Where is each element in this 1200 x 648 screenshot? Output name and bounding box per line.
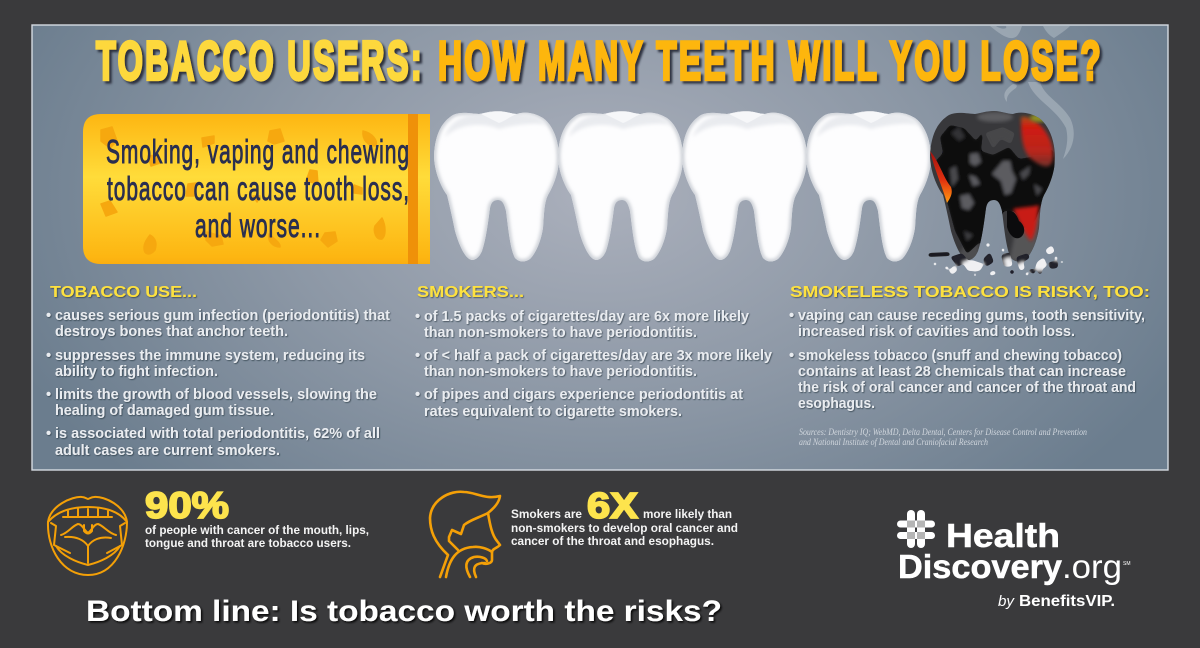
burn: top right	[1021, 117, 1053, 166]
dark patch over right root burn	[1007, 211, 1024, 238]
cigarette-shaped callout	[83, 114, 430, 264]
stat: 90 percent: of people with cancer of the mouth, lips,	[145, 523, 369, 537]
heading: smokeless tobacco: SMOKELESS TOBACCO IS RISKY, TOO:	[790, 284, 1150, 301]
logo: HealthDiscovery.org: .org	[1062, 548, 1122, 585]
title	[96, 30, 1103, 92]
stat: 90 percent	[145, 485, 369, 550]
column: tobacco use	[46, 284, 390, 459]
logo: HealthDiscovery.org: SM	[1123, 561, 1130, 567]
column: smokeless tobacco: •	[789, 348, 794, 364]
stat: 90 percent: 90%	[145, 485, 229, 526]
column: smokeless tobacco: the risk of oral cancer and cancer of the throat and	[798, 380, 1136, 396]
column: tobacco use: healing of damaged gum tissue.	[55, 403, 274, 419]
column: tobacco use: •	[46, 387, 51, 403]
icon: burnt tooth	[930, 111, 1055, 263]
column: smokers: of pipes and cigars experience periodontitis at	[424, 387, 743, 403]
column: smokeless tobacco: •	[789, 308, 794, 324]
column: smokers: than non-smokers to have periodontitis.	[424, 364, 697, 380]
column: smokers: •	[415, 348, 420, 364]
icon: healthy tooth 3	[682, 111, 807, 262]
icon: healthy tooth 1	[434, 111, 559, 262]
logo mark	[897, 510, 935, 548]
burn: right root	[1013, 205, 1039, 241]
icon: healthy tooth 2	[558, 111, 683, 262]
stat: 6X	[511, 485, 738, 548]
heading: tobacco use: TOBACCO USE...	[50, 284, 197, 301]
column: smokers: than non-smokers to have periodontitis.	[424, 325, 697, 341]
column: smokeless tobacco	[789, 284, 1150, 412]
logo: HealthDiscovery.org: Discovery	[898, 548, 1063, 585]
column: tobacco use: adult cases are current smokers.	[55, 443, 280, 459]
column: tobacco use: causes serious gum infection (periodontitis) that	[55, 308, 390, 324]
column: smokeless tobacco: smokeless tobacco (snuff and chewing tobacco)	[798, 348, 1122, 364]
tobacco flecks	[101, 127, 385, 254]
stat: 90 percent: tongue and throat are tobacco users.	[145, 536, 351, 550]
icon: open mouth	[48, 497, 127, 575]
burn: left edge	[930, 151, 952, 203]
sources note	[799, 427, 1087, 447]
column: tobacco use: destroys bones that anchor teeth.	[55, 324, 288, 340]
column: smokeless tobacco: increased risk of cavities and tooth loss.	[798, 324, 1075, 340]
sources note: Sources: Dentistry IQ; WebMD, Delta Dental, Centers for Disease Control and Prevention	[799, 427, 1087, 437]
stat: 6X: cancer of the throat and esophagus.	[511, 534, 714, 548]
stat: 6X: Smokers are	[511, 507, 582, 521]
sources note: and National Institute of Dental and Craniofacial Research	[799, 437, 988, 447]
column: smokers	[415, 284, 773, 420]
logo: HealthDiscovery.org: by	[998, 593, 1016, 610]
column: smokers: of < half a pack of cigarettes/day are 3x more likely	[424, 348, 773, 364]
column: tobacco use: limits the growth of blood vessels, slowing the	[55, 387, 377, 403]
column: smokers: of 1.5 packs of cigarettes/day are 6x more likely	[424, 309, 750, 325]
logo: HealthDiscovery.org: Health	[946, 517, 1060, 554]
column: smokers: •	[415, 309, 420, 325]
cigarette-shaped callout: tobacco can cause tooth loss,	[107, 170, 410, 207]
burnt mottling	[934, 125, 1055, 261]
bottom line: Bottom line: Is tobacco worth the risks?	[86, 595, 722, 628]
panel: main gradient panel	[32, 25, 1168, 470]
heading: smokers: SMOKERS...	[417, 284, 524, 301]
stat: 6X: more likely than	[643, 507, 732, 521]
cigarette-shaped callout: and worse...	[195, 207, 321, 244]
column: tobacco use: suppresses the immune system, reducing its	[55, 348, 365, 364]
icon: healthy tooth 4	[806, 111, 931, 262]
column: tobacco use: •	[46, 348, 51, 364]
column: smokeless tobacco: vaping can cause receding gums, tooth sensitivity,	[798, 308, 1145, 324]
column: tobacco use: ability to fight infection.	[55, 364, 218, 380]
logo: HealthDiscovery.org	[897, 510, 1130, 610]
column: smokers: rates equivalent to cigarette smokers.	[424, 404, 682, 420]
column: tobacco use: •	[46, 426, 51, 442]
stat: 6X: non-smokers to develop oral cancer and	[511, 521, 738, 535]
icon: debris under burnt tooth	[928, 243, 1064, 277]
smoke wisps	[990, 26, 1074, 159]
callout text: Smoking, vaping and chewing	[106, 133, 410, 170]
logo: HealthDiscovery.org: BenefitsVIP.	[1019, 593, 1115, 610]
stat: 6X: 6X	[587, 485, 638, 526]
column: smokeless tobacco: contains at least 28 chemicals that can increase	[798, 364, 1126, 380]
column: smokers: •	[415, 387, 420, 403]
column: tobacco use: is associated with total periodontitis, 62% of all	[55, 426, 380, 442]
column: smokeless tobacco: esophagus.	[798, 396, 875, 412]
column: tobacco use: •	[46, 308, 51, 324]
icon: head and throat	[430, 492, 500, 577]
title: TOBACCO USERS:	[96, 30, 424, 92]
